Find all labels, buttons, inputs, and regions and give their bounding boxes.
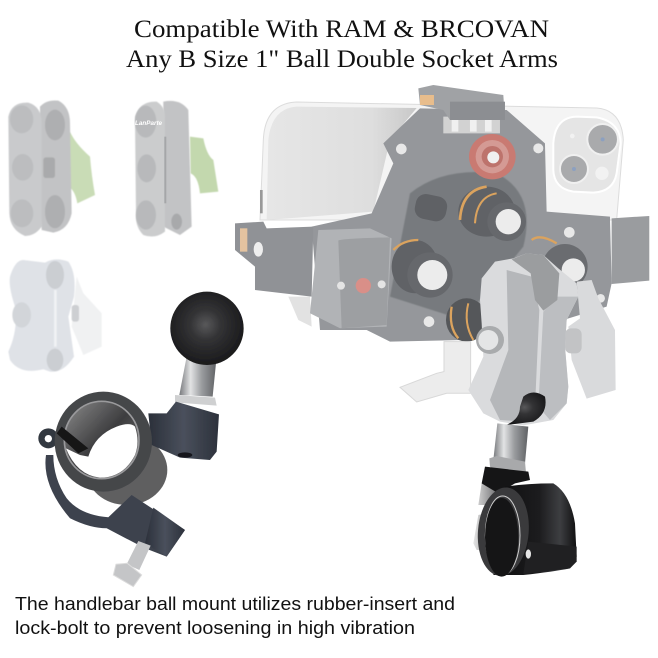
upper roller: [458, 187, 526, 241]
socket ball top: [512, 253, 559, 311]
caption: lock-bolt to prevent loosening in high vibration: [15, 618, 415, 638]
silver bracket: [473, 483, 498, 550]
handlebar clamp installed: [473, 423, 577, 578]
ball: [170, 292, 244, 365]
ring body: [493, 483, 577, 575]
phone camera: [553, 117, 621, 193]
left roller: [392, 240, 453, 298]
ring rim: [485, 496, 520, 575]
stem: [179, 357, 217, 397]
ring outer: [55, 392, 152, 492]
right roller: [532, 237, 588, 289]
ball: [505, 392, 546, 425]
foot bracket: [400, 342, 471, 402]
ring slit: [57, 427, 88, 453]
rear ring: [86, 435, 167, 505]
top clamp: [418, 85, 505, 133]
arm silhouette: [468, 253, 578, 425]
front block with red button: [310, 228, 392, 328]
ring hole: [485, 498, 518, 577]
icon: logo double socket arm with green lever: LanParte: [135, 120, 163, 127]
stem: [493, 423, 528, 463]
clamp block: [482, 467, 530, 493]
spring: [413, 192, 449, 223]
caption: The handlebar ball mount utilizes rubber-insert and: [15, 594, 455, 614]
holder back plate: [312, 108, 612, 342]
arm centre face: [490, 270, 539, 422]
handlebar ball mount clamp: [38, 292, 244, 587]
lower clamp arm: [45, 455, 185, 557]
phone holder, faded: [235, 85, 649, 402]
hex nut: [489, 456, 526, 476]
lever: [568, 280, 616, 399]
caption: [15, 594, 455, 638]
ring opening: [66, 424, 137, 478]
hex nut: [175, 395, 217, 406]
ear tab: [38, 428, 58, 448]
title: Compatible With RAM & BRCOVAN: [134, 16, 549, 43]
ring face: [474, 485, 532, 578]
plate screws: [396, 143, 605, 327]
stud: [476, 326, 504, 354]
arm right face: [538, 297, 578, 420]
title: [126, 16, 558, 73]
phone body: [260, 102, 623, 220]
plate shading: [390, 172, 527, 320]
icon: logo double socket arm with green lever: [135, 101, 218, 237]
ring inner: [64, 401, 139, 479]
icon: light silver socket arm: [8, 259, 102, 372]
lever screw: [565, 328, 582, 353]
title: Any B Size 1" Ball Double Socket Arms: [126, 46, 558, 73]
bolt head: [113, 563, 142, 587]
latch screw: [526, 549, 531, 559]
bolt shaft: [127, 541, 151, 570]
ring latch: [523, 542, 577, 574]
front socket arm with lever: [468, 253, 616, 425]
left side clamp: [235, 222, 313, 327]
red knob: [469, 134, 516, 179]
icon: grey double socket arm with green lever: [8, 100, 95, 236]
lower roller: [446, 298, 487, 342]
clamp block: [148, 402, 219, 460]
right side clamp: [612, 216, 649, 284]
